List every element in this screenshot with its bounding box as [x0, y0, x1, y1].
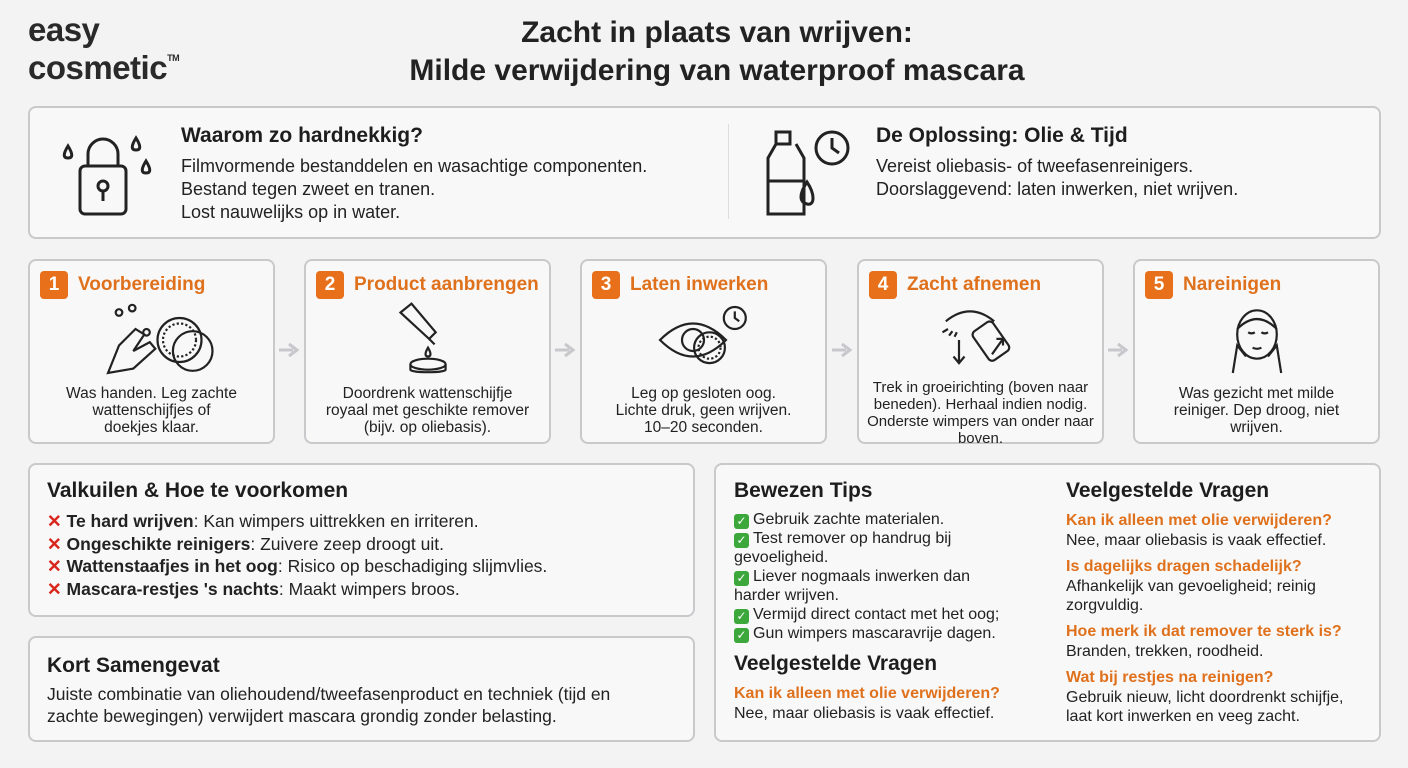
step 3: 10–20 seconden.	[644, 419, 763, 436]
step 2: (bijv. op oliebasis).	[364, 419, 491, 436]
list: tips: ✓	[736, 514, 747, 528]
step 4: boven.	[958, 430, 1003, 447]
logo: easy	[28, 11, 99, 48]
heading: valkuilen: Valkuilen & Hoe te voorkomen	[47, 479, 348, 502]
faq left	[734, 685, 1000, 722]
panel: tips & faq	[714, 463, 1381, 742]
text: waarom: Bestand tegen zweet en tranen.	[181, 179, 435, 199]
faq right: zorgvuldig.	[1066, 597, 1143, 614]
list: tips: ✓	[736, 571, 747, 585]
logo: cosmeticTM	[28, 49, 179, 86]
list: valkuilen: ✕ Mascara-restjes 's nachts: Maakt wimpers broos.	[47, 578, 460, 598]
heading: faq right: Veelgestelde Vragen	[1066, 479, 1269, 502]
step 1: wattenschijfjes of	[92, 402, 211, 419]
step 1	[28, 259, 275, 444]
list: tips: Vermijd direct contact met het oog;	[753, 606, 999, 623]
step 5: wrijven.	[1230, 419, 1283, 436]
step 4: Trek in groeirichting (boven naar	[873, 379, 1088, 396]
list: tips: Gebruik zachte materialen.	[753, 511, 944, 528]
faq right: Wat bij restjes na reinigen?	[1066, 669, 1273, 686]
faq right: Afhankelijk van gevoeligheid; reinig	[1066, 578, 1316, 595]
step 3	[580, 259, 827, 444]
faq right: Hoe merk ik dat remover te sterk is?	[1066, 623, 1342, 640]
step 3: 3	[601, 274, 611, 295]
faq right: Is dagelijks dragen schadelijk?	[1066, 558, 1302, 575]
text: samenvatting: Juiste combinatie van oliehoudend/tweefasenproduct en techniek (tijd en	[47, 684, 610, 704]
title: Zacht in plaats van wrijven:	[521, 16, 913, 49]
text: samenvatting	[47, 684, 610, 726]
panel: kort samengevat	[28, 636, 695, 742]
step 2: Product aanbrengen	[354, 274, 539, 295]
arrow 1	[279, 343, 300, 357]
list: tips: Test remover op handrug bij	[753, 530, 951, 547]
arrow 3	[832, 343, 852, 357]
text: oplossing: Vereist oliebasis- of tweefasenreinigers.	[876, 156, 1193, 176]
step 4: Onderste wimpers van onder naar	[867, 413, 1094, 430]
icon: eye with pad and clock	[658, 306, 747, 364]
text: waarom: Lost nauwelijks op in water.	[181, 202, 400, 222]
text: oplossing: Doorslaggevend: laten inwerken, niet wrijven.	[876, 179, 1238, 199]
title: Milde verwijdering van waterproof mascara	[409, 54, 1025, 87]
heading: oplossing: De Oplossing: Olie & Tijd	[876, 124, 1128, 147]
step 4: beneden). Herhaal indien nodig.	[874, 396, 1087, 413]
faq right: Nee, maar oliebasis is vaak effectief.	[1066, 532, 1326, 549]
step 4: 4	[878, 274, 888, 295]
list: tips	[734, 511, 999, 643]
step 2: Doordrenk wattenschijfje	[343, 385, 512, 402]
title	[409, 16, 1025, 87]
arrow 2	[555, 343, 576, 357]
heading: waarom: Waarom zo hardnekkig?	[181, 124, 423, 147]
icon: face washing	[1232, 309, 1282, 374]
step 5: reiniger. Dep droog, niet	[1174, 402, 1339, 419]
logo	[28, 11, 180, 86]
faq left: Nee, maar oliebasis is vaak effectief.	[734, 705, 994, 722]
step 2: royaal met geschikte remover	[326, 402, 529, 419]
list: tips: gevoeligheid.	[734, 549, 828, 566]
panel: kort samengevat: Kort Samengevat	[47, 654, 220, 677]
heading: faq left: Veelgestelde Vragen	[734, 652, 937, 675]
faq right	[1066, 512, 1343, 725]
list: tips: ✓	[736, 609, 747, 623]
step 2: 2	[325, 274, 335, 295]
step 3: Leg op gesloten oog.	[631, 385, 776, 402]
step 1: 1	[49, 274, 59, 295]
icon: bottle clock drop	[766, 130, 850, 216]
faq right: Branden, trekken, roodheid.	[1066, 643, 1263, 660]
icon: lock with drops	[62, 135, 152, 216]
step 5: Nareinigen	[1183, 274, 1281, 295]
text: waarom: Filmvormende bestanddelen en wasachtige componenten.	[181, 156, 647, 176]
faq right: Kan ik alleen met olie verwijderen?	[1066, 512, 1332, 529]
list: valkuilen: ✕ Ongeschikte reinigers: Zuivere zeep droogt uit.	[47, 534, 444, 554]
step 3: Laten inwerken	[630, 274, 768, 295]
icon: washing hands	[106, 304, 214, 374]
list: tips: Liever nogmaals inwerken dan	[753, 568, 970, 585]
icon: bottle pouring	[398, 302, 447, 374]
step 5: Was gezicht met milde	[1179, 385, 1334, 402]
step 1: doekjes klaar.	[104, 419, 199, 436]
step 2	[304, 259, 551, 444]
panel: top info	[28, 106, 1381, 239]
panel: valkuilen	[28, 463, 695, 617]
text: samenvatting: zachte bewegingen) verwijdert mascara grondig zonder belasting.	[47, 706, 557, 726]
step 5: 5	[1154, 274, 1164, 295]
list: tips: Gun wimpers mascaravrije dagen.	[753, 625, 996, 642]
faq right: Gebruik nieuw, licht doordrenkt schijfje,	[1066, 689, 1343, 706]
list: tips: ✓	[736, 533, 747, 547]
step 4	[857, 259, 1104, 444]
icon: closed eye swipe	[942, 310, 1010, 365]
step 1: Voorbereiding	[78, 274, 205, 295]
list: tips: ✓	[736, 628, 747, 642]
step 5	[1133, 259, 1380, 444]
heading: tips: Bewezen Tips	[734, 479, 872, 502]
arrow 4	[1108, 343, 1128, 357]
step 4: Zacht afnemen	[907, 274, 1041, 295]
text: waarom	[181, 156, 647, 222]
step 1: Was handen. Leg zachte	[66, 385, 237, 402]
list: valkuilen	[47, 511, 547, 598]
text: oplossing	[876, 156, 1238, 199]
faq right: laat kort inwerken en veeg zacht.	[1066, 708, 1300, 725]
step 3: Lichte druk, geen wrijven.	[616, 402, 791, 419]
list: tips: harder wrijven.	[734, 587, 839, 604]
list: valkuilen: ✕ Wattenstaafjes in het oog: Risico op beschadiging slijmvlies.	[47, 556, 547, 576]
faq left: Kan ik alleen met olie verwijderen?	[734, 685, 1000, 702]
list: valkuilen: ✕ Te hard wrijven: Kan wimpers uittrekken en irriteren.	[47, 511, 479, 531]
